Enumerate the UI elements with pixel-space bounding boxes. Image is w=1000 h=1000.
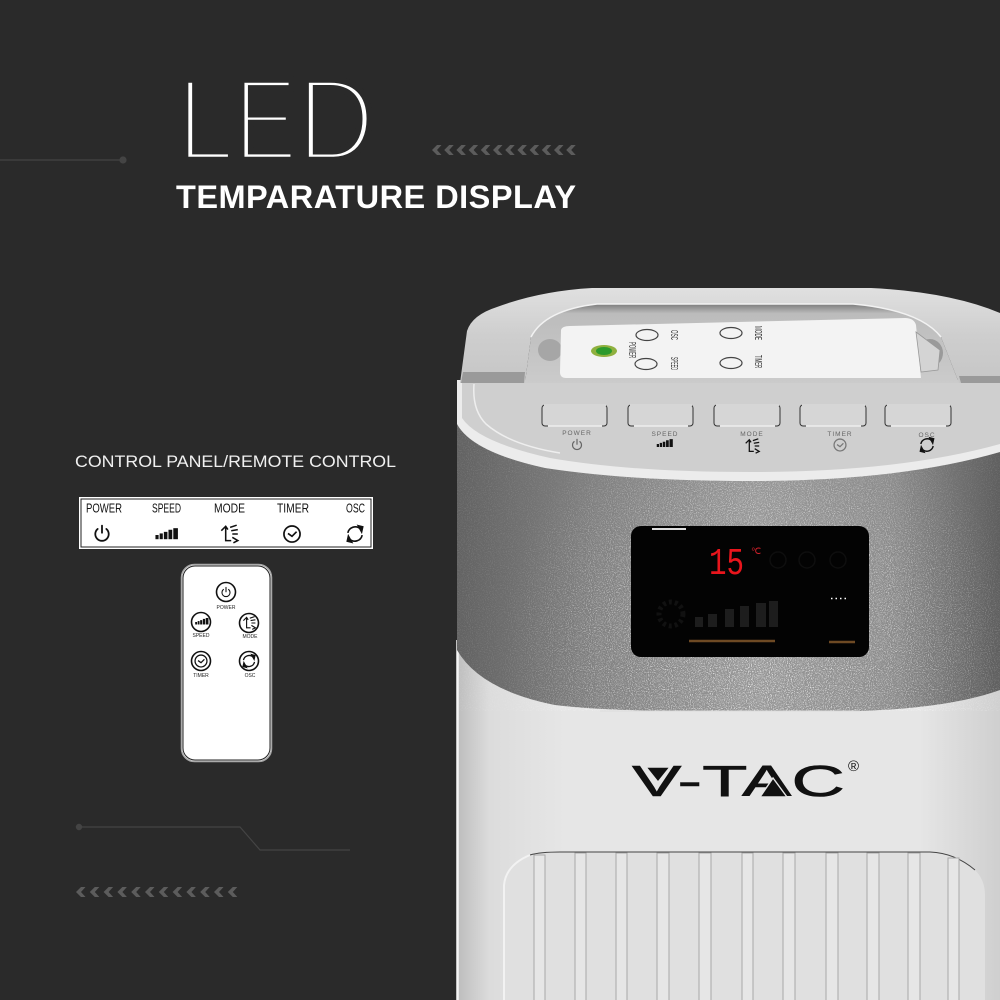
panel button labels: OSC	[918, 432, 936, 439]
chevron row, top	[432, 145, 576, 155]
control labels: OSC	[346, 500, 365, 516]
panel button labels: MODE	[740, 431, 764, 438]
control labels: SPEED	[152, 500, 181, 516]
remote labels: SPEED	[193, 633, 210, 639]
docked remote icons	[635, 328, 742, 370]
docked remote labels	[626, 326, 763, 370]
control labels: TIMER	[277, 500, 309, 516]
remote labels: OSC	[245, 673, 256, 679]
temperature reading: 15	[709, 543, 744, 586]
faint fan icon	[659, 602, 683, 626]
docked remote labels: MODE	[752, 326, 763, 340]
title: LED: L	[177, 55, 234, 185]
panel button labels: TIMER	[827, 431, 853, 438]
decorative circuit line, lower left	[76, 824, 350, 850]
faint status icons	[770, 552, 846, 568]
control panel legend	[80, 498, 372, 548]
control labels: MODE	[214, 500, 245, 516]
product: tower fan: SPEED	[668, 357, 679, 370]
remote labels: TIMER	[193, 673, 209, 679]
fan body, white lower part	[457, 600, 1000, 1000]
heading: control panel / remote control: CONTROL PANEL/REMOTE CONTROL	[75, 452, 396, 471]
remote clip	[916, 332, 940, 372]
title: LED: E	[234, 55, 297, 185]
faint speed bars	[695, 601, 778, 627]
control labels	[86, 500, 365, 516]
logo triangle accents	[646, 767, 787, 797]
remote labels: POWER	[217, 605, 236, 611]
silver band	[457, 395, 1000, 711]
title: LED: D	[297, 54, 375, 185]
decorative line with dot, top left	[0, 156, 127, 164]
remote buttons	[192, 582, 258, 670]
product: tower fan: TIMER	[752, 355, 763, 368]
control labels: POWER	[86, 500, 122, 516]
brand logo: V-TAC	[632, 757, 845, 806]
panel button labels: SPEED	[651, 431, 679, 438]
docked remote labels: POWER	[626, 342, 637, 358]
brand logo	[632, 757, 859, 806]
control recess	[525, 304, 959, 383]
product: tower fan	[457, 288, 1000, 1000]
amber indicator lines	[689, 641, 855, 642]
top control surface	[462, 380, 1000, 472]
control icons	[95, 525, 363, 543]
chevron row, bottom	[76, 887, 237, 897]
handle frame	[460, 288, 1000, 383]
docked remote labels: OSC	[668, 330, 679, 340]
subtitle: temperature display: TEMPARATURE DISPLAY	[176, 179, 576, 215]
remote docked in top	[560, 318, 921, 378]
top panel rim	[457, 380, 1000, 481]
air grille	[504, 852, 985, 1000]
title: LED	[177, 54, 375, 185]
remote labels: MODE	[242, 634, 258, 640]
remote button icons	[195, 587, 255, 667]
LED display	[631, 526, 869, 657]
panel button icons	[573, 438, 934, 453]
panel button labels	[562, 430, 936, 439]
remote labels	[193, 605, 258, 679]
panel buttons	[542, 405, 951, 426]
registered mark: ®	[848, 758, 859, 775]
degree unit: ℃	[751, 546, 761, 556]
power button, green	[591, 345, 617, 357]
white indicator dots	[831, 598, 846, 600]
remote control	[182, 564, 272, 762]
grille ribs	[534, 853, 959, 1000]
panel button labels: POWER	[562, 430, 592, 437]
